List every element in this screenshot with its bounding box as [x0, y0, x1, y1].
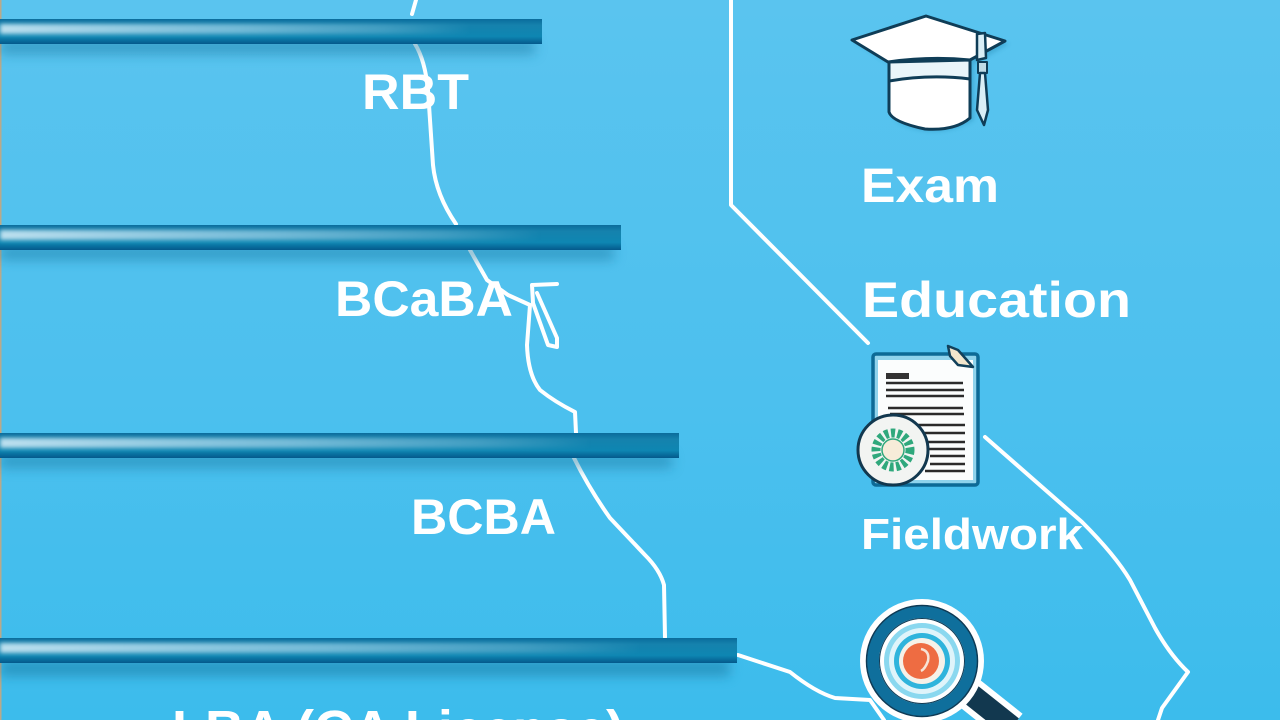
- icon: magnifying glass: [860, 599, 1012, 720]
- bar: LBA: [0, 638, 737, 676]
- label: Exam: Exam: [861, 160, 999, 213]
- label: BCaBA: BCaBA: [335, 271, 513, 327]
- label: BCBA: BCBA: [411, 489, 556, 545]
- icon: document with seal: [858, 346, 978, 485]
- bar: RBT: [0, 19, 542, 54]
- icon: seal: [858, 415, 928, 485]
- California outline: [412, 0, 1188, 720]
- label: Fieldwork: Fieldwork: [861, 510, 1084, 559]
- icon: graduation cap: [852, 16, 1009, 132]
- bar: BCBA: [0, 433, 679, 468]
- label: RBT: RBT: [362, 64, 469, 120]
- label: Education: Education: [862, 272, 1131, 328]
- bar: BCaBA: [0, 225, 621, 260]
- credential bars: [0, 19, 737, 676]
